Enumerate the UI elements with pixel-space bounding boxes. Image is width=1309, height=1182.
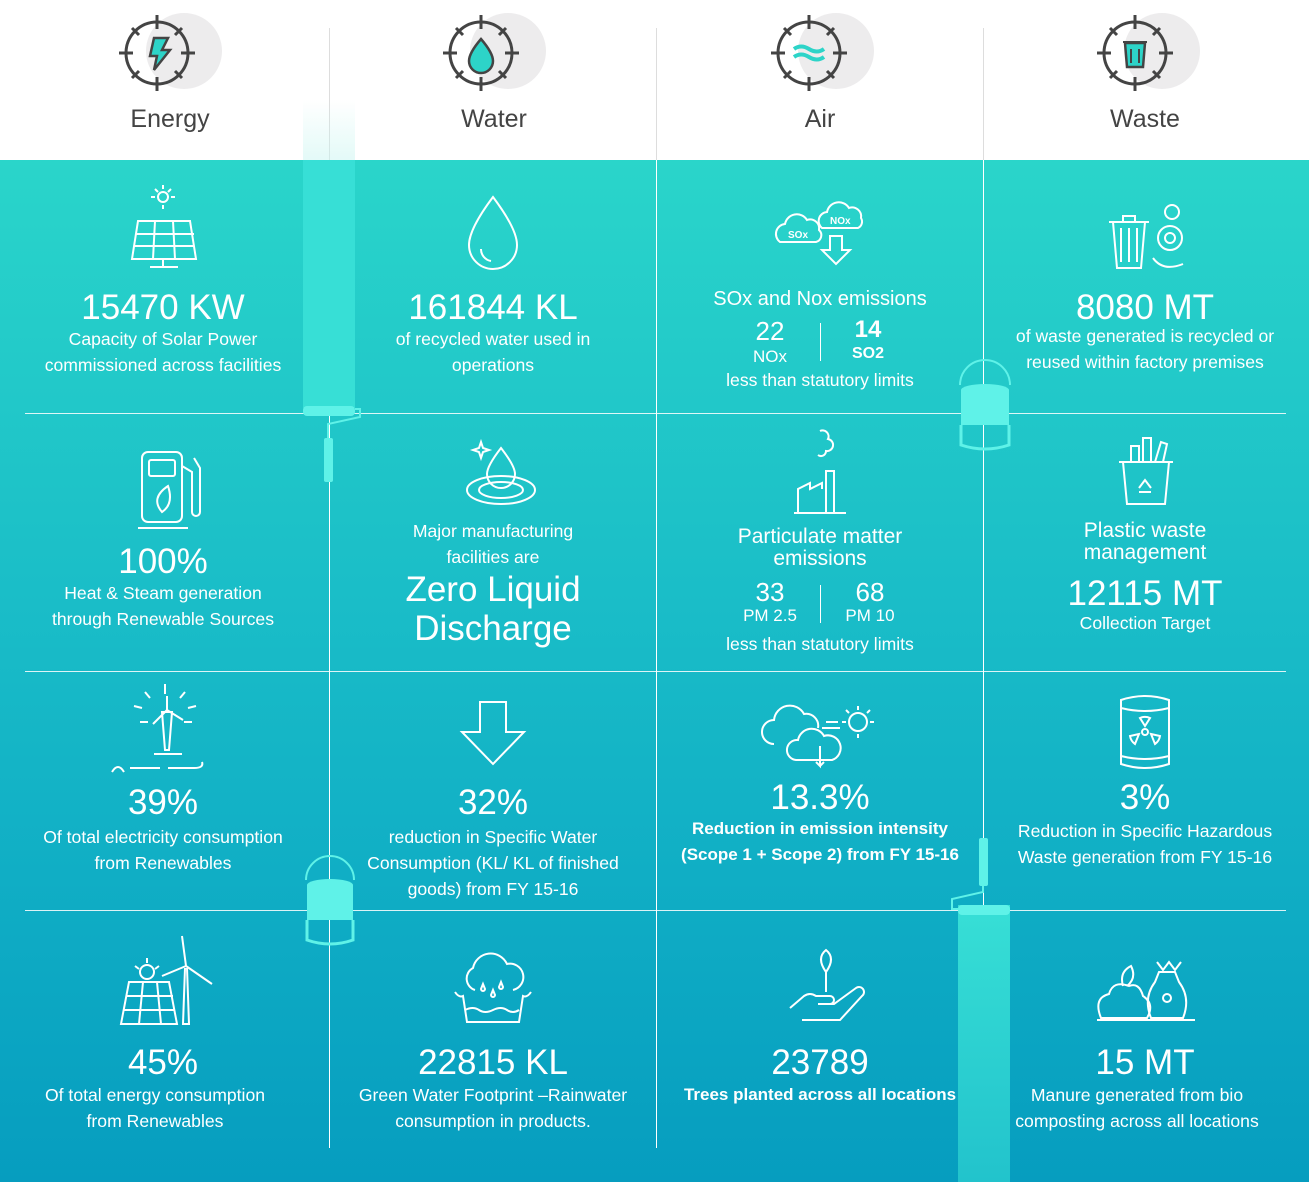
cell: recycled water: 161844 KL xyxy=(408,288,578,327)
header: Energy: Energy xyxy=(130,105,210,133)
cell: waste recycled xyxy=(1016,204,1274,372)
cell: SOx NOx: NOx xyxy=(753,347,787,366)
cell: SOx NOx: SO2 xyxy=(852,345,884,362)
cell: trees: Trees planted across all locations xyxy=(684,1085,956,1104)
decoration: bucket left xyxy=(305,855,355,946)
cell: SOx NOx xyxy=(713,201,927,390)
cell: 22815 KL: 22815 KL xyxy=(418,1043,568,1082)
cell: plastic waste: management xyxy=(1084,541,1206,564)
header: Waste: Waste xyxy=(1110,105,1180,133)
cell: manure: 15 MT xyxy=(1095,1043,1195,1082)
cell: particulate: emissions xyxy=(773,547,867,570)
cell: 22815 KL: Green Water Footprint –Rainwater xyxy=(359,1085,627,1105)
cell: plastic waste xyxy=(1068,437,1222,633)
cell: particulate: Particulate matter xyxy=(738,525,902,548)
cell: particulate xyxy=(726,429,914,654)
cell: solar power: commissioned across facilities xyxy=(45,355,281,375)
cell: 13.3%: (Scope 1 + Scope 2) from FY 15-16 xyxy=(681,845,959,864)
cell: recycled water: operations xyxy=(452,355,534,375)
cell: 22815 KL xyxy=(359,952,627,1131)
cell: 3% xyxy=(1018,695,1272,867)
cell: 13.3%: Reduction in emission intensity xyxy=(692,819,948,838)
cell: particulate: PM 10 xyxy=(845,606,895,625)
cell: plastic waste: Plastic waste xyxy=(1084,519,1206,542)
cell: trees: 23789 xyxy=(771,1043,869,1082)
cell: particulate: 33 xyxy=(756,577,784,607)
header: Water xyxy=(443,13,546,133)
cell: particulate: 68 xyxy=(856,577,884,607)
cell: 3%: Reduction in Specific Hazardous xyxy=(1018,821,1272,841)
header: Energy xyxy=(119,13,222,133)
cell: SOx NOx: 14 xyxy=(855,316,881,343)
cell: solar power: 15470 KW xyxy=(81,288,245,327)
cell: 3%: 3% xyxy=(1120,778,1170,817)
header: Air xyxy=(771,13,874,133)
cell: 39%: 39% xyxy=(128,783,198,822)
cell: 100% heat: Heat & Steam generation xyxy=(64,583,262,603)
decoration: bucket right xyxy=(959,359,1011,450)
cell: manure xyxy=(1015,960,1259,1131)
cell: 22815 KL: consumption in products. xyxy=(395,1111,591,1131)
cell: 45%: Of total energy consumption xyxy=(45,1085,265,1105)
cell: solar power xyxy=(45,185,281,375)
cell: 100% heat: 100% xyxy=(118,542,208,581)
cell: manure: composting across all locations xyxy=(1015,1111,1259,1131)
cell: 32% xyxy=(367,701,619,899)
cell: plastic waste: Collection Target xyxy=(1080,613,1210,633)
cell: 3%: Waste generation from FY 15-16 xyxy=(1018,847,1272,867)
decoration: paint roller top xyxy=(303,118,355,416)
cell: 39%: from Renewables xyxy=(95,853,231,873)
cell: waste recycled: 8080 MT xyxy=(1076,288,1214,327)
header: Air: Air xyxy=(805,105,835,133)
cell: ZLD: Discharge xyxy=(414,609,572,648)
cell: 32%: goods) from FY 15-16 xyxy=(408,879,578,899)
cell: SOx NOx: NOx xyxy=(830,216,851,227)
cell: 13.3% xyxy=(681,704,959,864)
column dividers xyxy=(329,28,330,1148)
header: Water: Water xyxy=(461,105,527,133)
cell: 13.3%: 13.3% xyxy=(770,778,870,817)
cell: 45% xyxy=(45,936,265,1131)
cell: SOx NOx: SOx and Nox emissions xyxy=(713,288,927,310)
cell: 45%: 45% xyxy=(128,1043,198,1082)
cell: 100% heat: through Renewable Sources xyxy=(52,609,274,629)
cell: 39%: Of total electricity consumption xyxy=(43,827,283,847)
cell: 100% heat xyxy=(52,451,274,629)
cell: SOx NOx: 22 xyxy=(756,316,784,346)
header: Waste xyxy=(1097,13,1200,133)
cell: ZLD: facilities are xyxy=(447,547,539,567)
cell: trees xyxy=(684,948,956,1104)
cell: ZLD: Major manufacturing xyxy=(413,521,573,541)
cell: particulate: less than statutory limits xyxy=(726,634,914,654)
cell: recycled water xyxy=(396,196,590,375)
decoration: bottom roller xyxy=(958,905,1010,1182)
cell: 45%: from Renewables xyxy=(87,1111,223,1131)
cell: waste recycled: of waste generated is recycled or xyxy=(1016,326,1274,346)
cell: ZLD xyxy=(405,439,581,648)
cell: manure: Manure generated from bio xyxy=(1031,1085,1243,1105)
cell: plastic waste: 12115 MT xyxy=(1068,574,1222,613)
cell: 32%: Consumption (KL/ KL of finished xyxy=(367,853,619,873)
cell: SOx NOx: less than statutory limits xyxy=(726,370,914,390)
cell: particulate: PM 2.5 xyxy=(743,606,797,625)
cell: waste recycled: reused within factory premises xyxy=(1026,352,1264,372)
cell: 32%: reduction in Specific Water xyxy=(389,827,597,847)
cell: recycled water: of recycled water used in xyxy=(396,329,590,349)
cell: solar power: Capacity of Solar Power xyxy=(69,329,257,349)
cell: 32%: 32% xyxy=(458,783,528,822)
cell: ZLD: Zero Liquid xyxy=(405,570,581,609)
cell: 39% xyxy=(43,684,283,873)
cell: SOx NOx: SOx xyxy=(788,230,808,241)
